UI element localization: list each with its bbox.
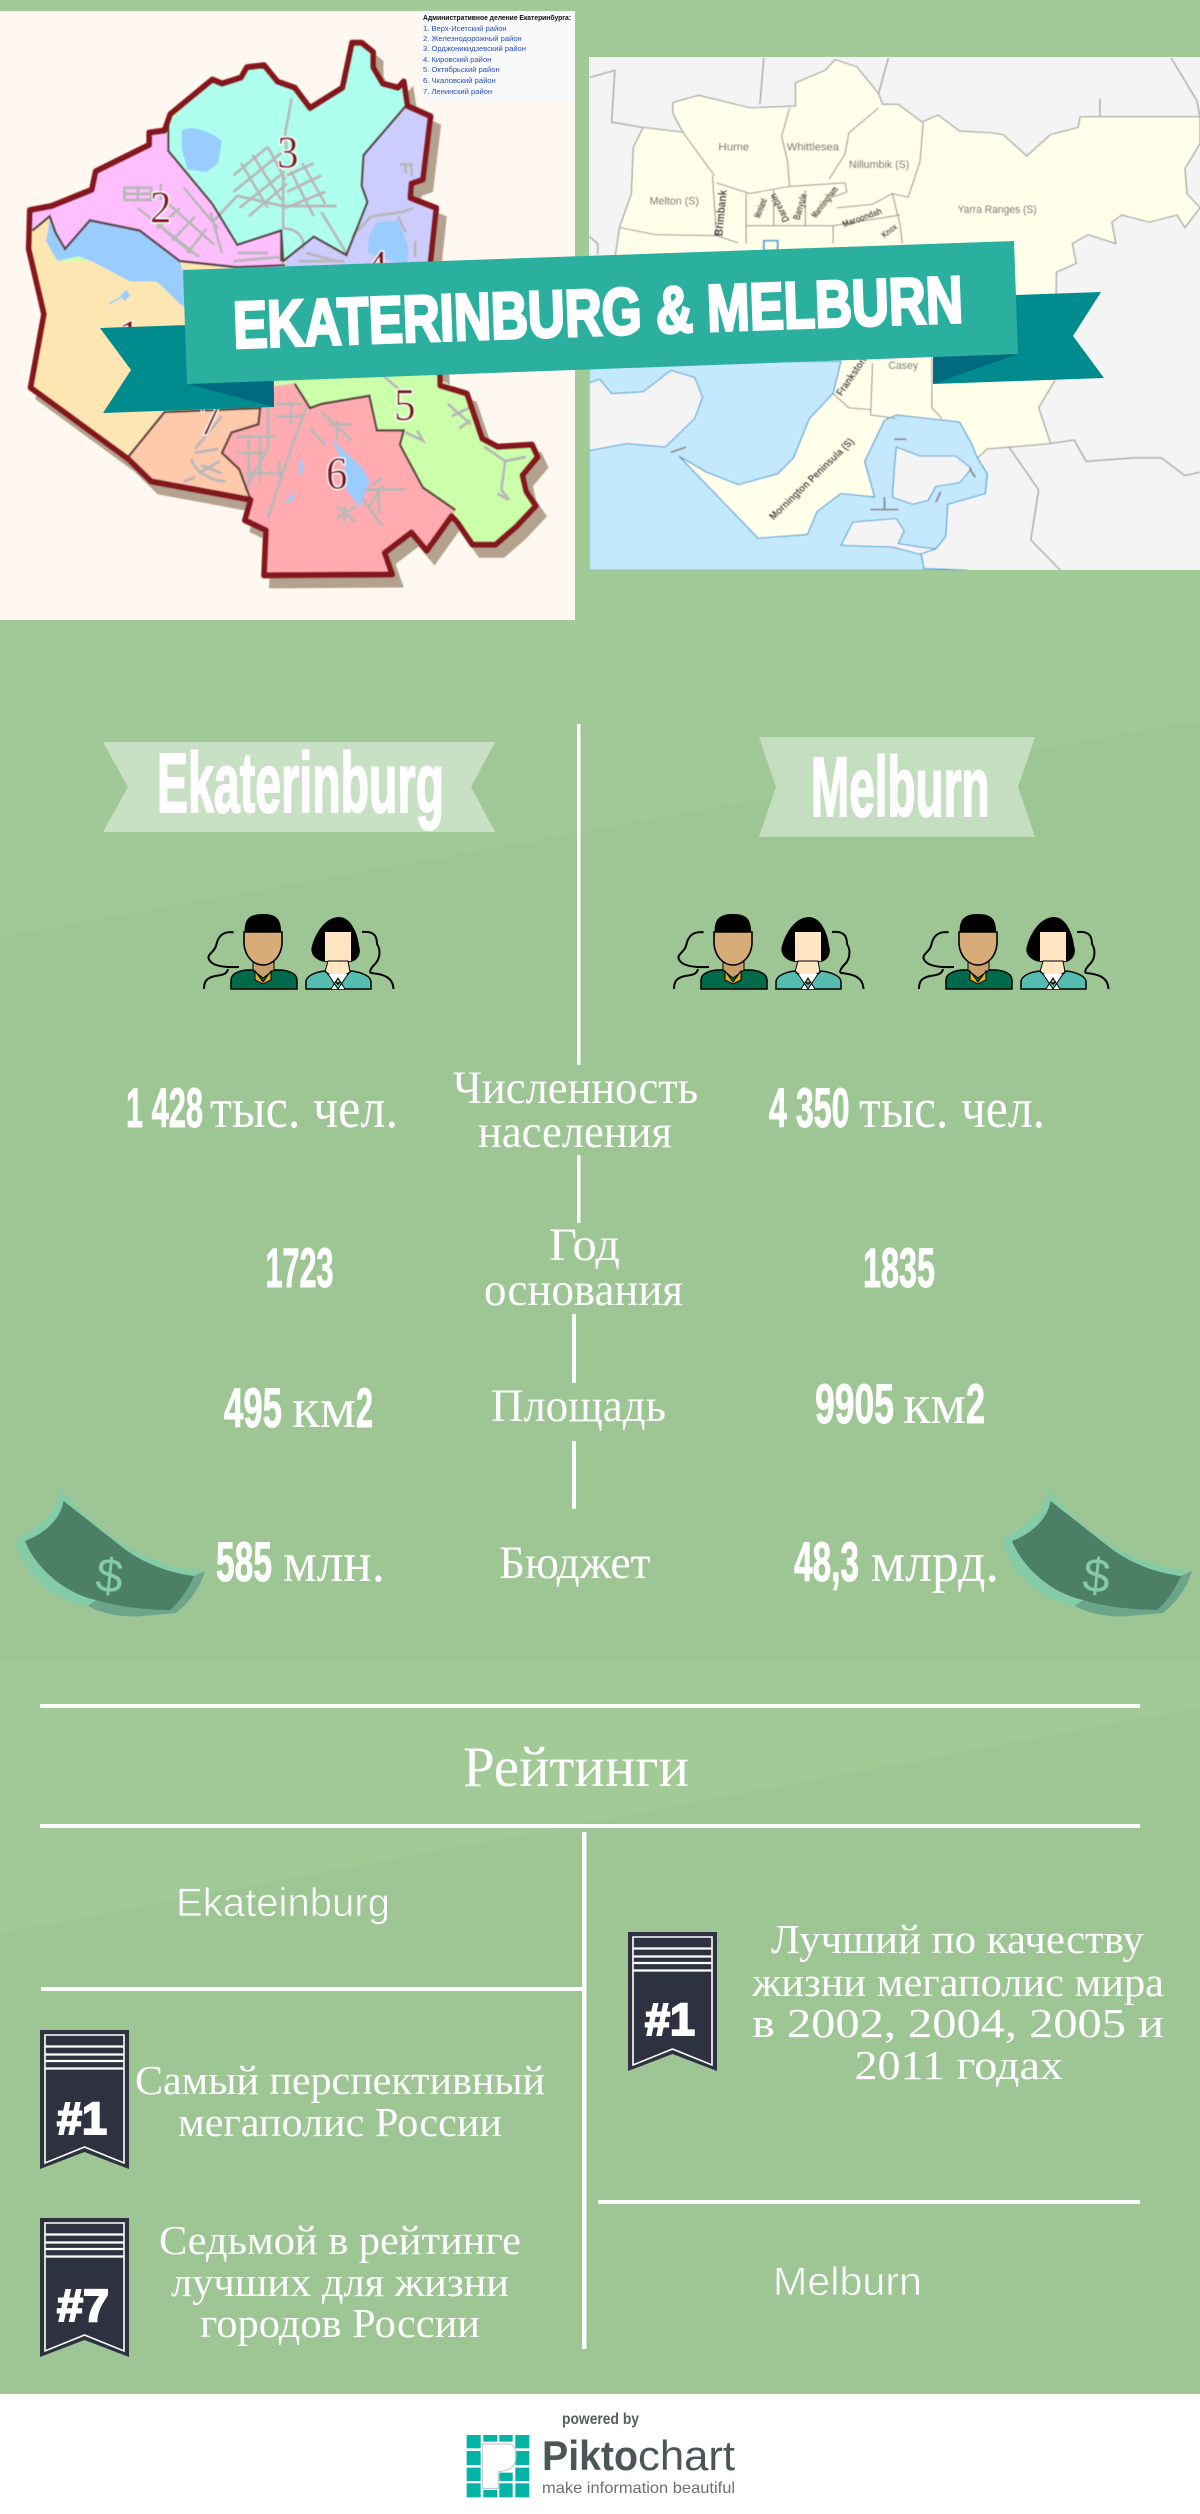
stat row: founding year — [266, 1219, 935, 1316]
city ribbon: Melburn: Melburn — [811, 740, 990, 834]
map legend: 3. Орджоникидзевский район — [423, 44, 526, 53]
rating: seventh best to live: городов России — [200, 2300, 480, 2346]
stat row: budget: Бюджет — [499, 1537, 650, 1589]
rating: first promising megapolis: мегаполис России — [178, 2099, 502, 2145]
rating: first promising megapolis — [40, 2030, 545, 2169]
stat row: area: км — [903, 1374, 966, 1436]
stat row: area: 495 — [224, 1376, 282, 1439]
lakes — [121, 128, 408, 508]
badge #1 — [40, 2030, 129, 2169]
map legend: 1. Верх-Исетский район — [423, 24, 507, 33]
map legend — [421, 11, 575, 101]
central divider — [572, 724, 580, 1509]
grey peninsulas and islands — [589, 370, 703, 451]
icon: banknote right — [1002, 1488, 1192, 1616]
district numbers: 4 — [366, 241, 388, 292]
stat row: budget: млрд. — [871, 1532, 999, 1594]
panel: Melbourne map: Nillumbik (S) — [849, 159, 910, 171]
icon: banknote left — [15, 1488, 205, 1616]
stat row: budget: млн. — [283, 1532, 385, 1594]
stat row: area: Площадь — [491, 1380, 666, 1432]
stat row: population: тыс. чел. — [859, 1078, 1045, 1140]
panel: Melbourne map: Frankston — [834, 356, 870, 398]
district map — [29, 43, 545, 585]
footer: Piktochart — [467, 2411, 735, 2497]
section: ratings heading — [40, 1704, 1140, 1828]
map legend: 6. Чкаловский район — [423, 76, 496, 85]
panel: Melbourne map: Mornington Peninsula (S) — [767, 436, 857, 522]
stat row: founding year: основания — [484, 1264, 683, 1316]
panel: Melbourne map: Darebin — [768, 192, 792, 224]
streets — [124, 98, 526, 526]
stat row: population: 4 350 — [769, 1076, 850, 1139]
heading: Melburn: Melburn — [773, 2260, 922, 2304]
heading: Ekateinburg: Ekateinburg — [176, 1881, 390, 1925]
panel: Melbourne map: Melton (S) — [650, 196, 699, 207]
badge #1 Melburn — [628, 1932, 717, 2071]
district numbers: 2 — [150, 182, 171, 233]
rating: seventh best to live — [40, 2217, 521, 2357]
panel: Ekaterinburg map — [0, 11, 575, 620]
icon: Piktochart logo — [467, 2435, 529, 2497]
district numbers: 3 — [277, 127, 299, 178]
ratings dividers — [41, 1832, 1140, 2349]
city ribbon: Ekaterinburg — [103, 736, 495, 832]
stat row: founding year: 1723 — [266, 1236, 334, 1299]
rating: best quality of life: в 2002, 2004, 2005 и — [752, 2000, 1164, 2046]
rating: best quality of life: 2011 годах — [854, 2042, 1063, 2088]
stat row: budget: 585 — [216, 1530, 272, 1593]
badge #7: #7 — [57, 2280, 109, 2331]
badge #7 — [40, 2218, 129, 2357]
panel: Melbourne map: Knox — [879, 222, 899, 240]
map legend: 4. Кировский район — [423, 55, 491, 64]
footer: Piktochart: chart — [638, 2432, 735, 2479]
stat row: area: км — [292, 1378, 356, 1440]
footer: Piktochart: make information beautiful — [542, 2480, 735, 2497]
district numbers: 7 — [199, 394, 220, 445]
district numbers — [119, 127, 416, 499]
banner band — [183, 241, 1018, 384]
rating: best quality of life: Лучший по качеству — [771, 1916, 1145, 1962]
district boundaries — [33, 106, 455, 510]
panel: Melbourne map: Casey — [888, 361, 918, 372]
map legend: Административное деление Екатеринбурга: — [423, 13, 571, 22]
title banner — [100, 241, 1104, 413]
municipality borders — [589, 58, 1200, 570]
rating: seventh best to live: Седьмой в рейтинге — [159, 2217, 521, 2263]
title: EKATERINBURG & MELBURN — [232, 262, 964, 362]
stat row: area: 2 — [966, 1372, 985, 1435]
panel: Melbourne map: Whittlesea — [787, 142, 840, 154]
land — [616, 60, 1200, 538]
stat row: budget: 48,3 — [794, 1530, 859, 1593]
left ribbon tail — [100, 322, 274, 413]
footer: Piktochart: Pikto — [542, 2432, 638, 2479]
map legend: 2. Железнодорожный район — [423, 34, 522, 43]
panel: Melbourne map: Maroondah — [841, 206, 884, 230]
panel: Melbourne map: Manningham — [809, 185, 841, 220]
stat row: population: 1 428 — [126, 1076, 203, 1139]
icon: people Melburn — [674, 914, 1108, 989]
stat row: budget — [216, 1530, 999, 1594]
rating: seventh best to live: лучших для жизни — [171, 2259, 509, 2305]
stat row: population: Численность — [453, 1062, 698, 1114]
district numbers: 1 — [119, 311, 140, 361]
city ribbon: Ekaterinburg: Ekaterinburg — [157, 736, 444, 830]
badge #1 Melburn: #1 — [645, 1994, 695, 2045]
stat row: area: 9905 — [815, 1372, 894, 1435]
rating: best quality of life: жизни мегаполис мира — [751, 1959, 1164, 2005]
panel: Melbourne map: Brimbank — [713, 189, 730, 237]
panel: Melbourne map — [589, 57, 1200, 570]
panel: Melbourne map: Banyule — [791, 192, 810, 221]
stat row: population: населения — [478, 1106, 672, 1158]
section: ratings heading: Рейтинги — [463, 1736, 689, 1799]
right ribbon tail — [933, 292, 1104, 384]
stat row: population: тыс. чел. — [210, 1078, 398, 1140]
stat row: population — [126, 1062, 1045, 1158]
labels: Hume — [718, 142, 749, 154]
district numbers: 5 — [394, 380, 416, 431]
stat row: area — [224, 1372, 985, 1440]
panel: Melbourne map: Yarra Ranges (S) — [958, 204, 1037, 216]
badge #1: #1 — [57, 2093, 107, 2144]
map legend: 7. Ленинский район — [423, 87, 492, 96]
icon: people Ekaterinburg — [204, 914, 394, 989]
district numbers: 6 — [326, 448, 347, 499]
map legend: 5. Октябрьский район — [423, 65, 500, 74]
footer: Piktochart: powered by — [562, 2411, 639, 2428]
city ribbon: Melburn — [759, 737, 1035, 837]
rating: first promising megapolis: Самый перспективный — [135, 2057, 545, 2103]
panel: Melbourne map: Moreland — [752, 197, 770, 220]
stat row: founding year: 1835 — [863, 1236, 935, 1299]
stat row: area: 2 — [356, 1376, 373, 1439]
water — [589, 361, 987, 570]
stat row: founding year: Год — [549, 1219, 620, 1271]
rating: best quality of life — [628, 1916, 1164, 2088]
